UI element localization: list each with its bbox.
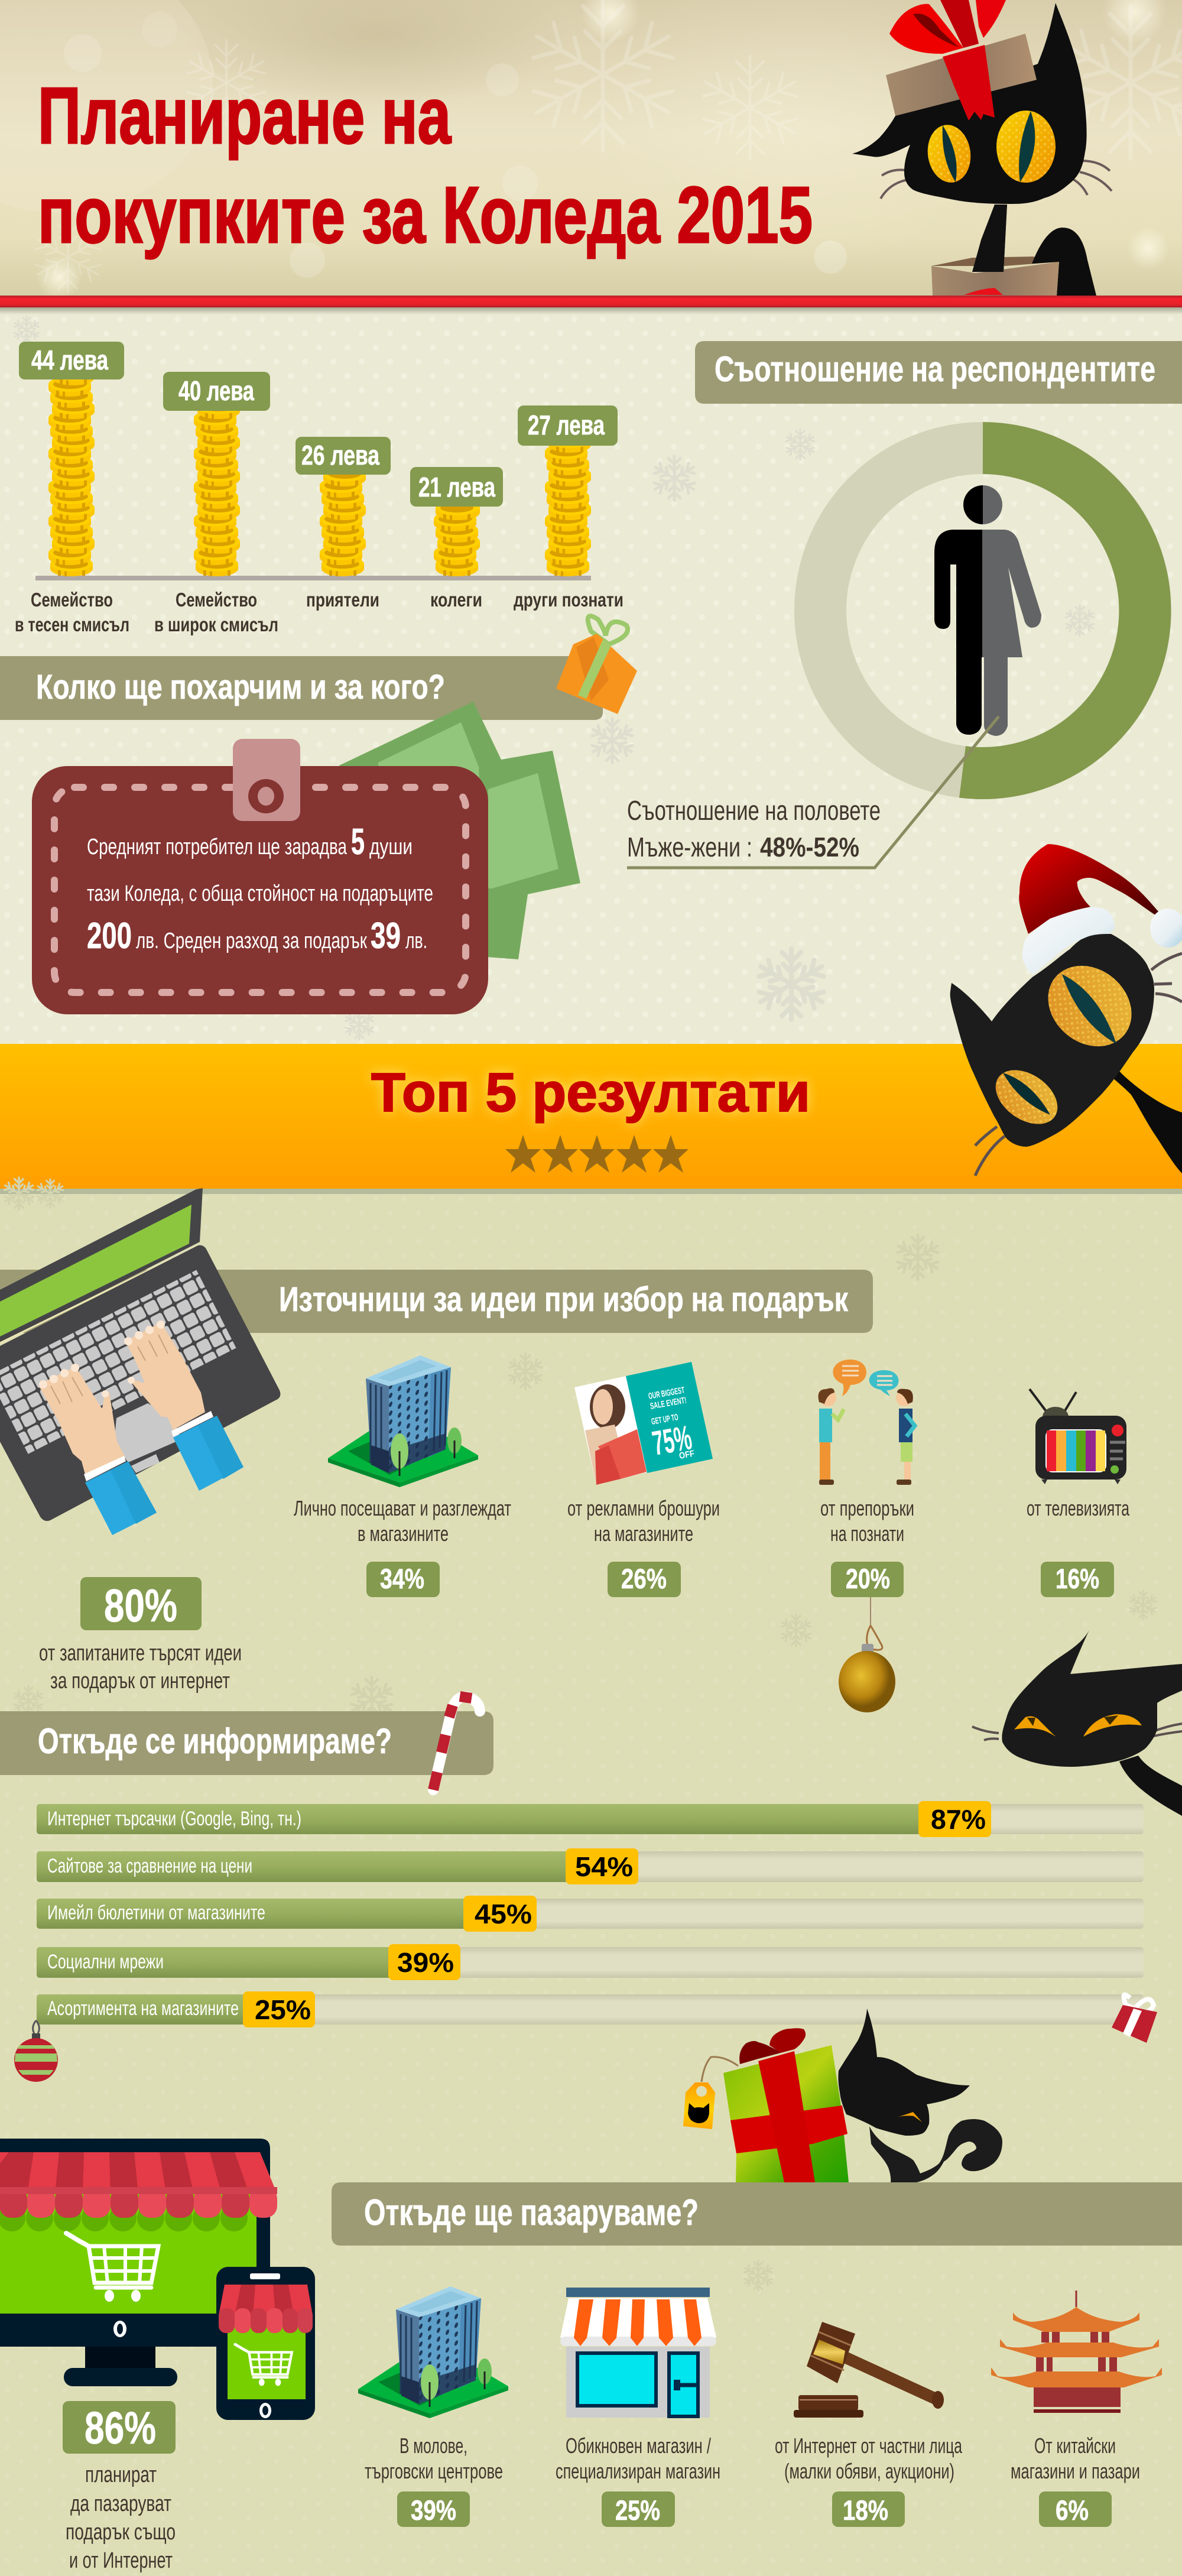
- label: private sellers online: (малки обяви, аукциони): [784, 2459, 954, 2483]
- value label: 27 лева: 27 лева: [528, 410, 605, 440]
- value: 25%: 25%: [615, 2494, 660, 2526]
- coin stack: other acquaintances: [545, 433, 591, 576]
- illustration: online shop monitor: [0, 2139, 277, 2386]
- axis labels: Семейство: [176, 589, 257, 611]
- bar chart: gift spending as coin stacks: [15, 342, 624, 635]
- wallet text: Средният потребител ще зарадва: [87, 835, 348, 859]
- value: 34%: 34%: [380, 1563, 424, 1594]
- left hand and sleeve: [39, 1364, 157, 1535]
- stat: 86% plan to shop online: и от Интернет: [69, 2548, 173, 2573]
- wallet text: лв. Среден разход за подарък: [136, 929, 367, 953]
- value: 16%: [1041, 1562, 1114, 1597]
- bar: 45% email newsletters: [37, 1896, 1144, 1932]
- icon: advertising flyer: [574, 1362, 713, 1485]
- label: flyers: от рекламни брошури: [567, 1496, 720, 1520]
- header banner background: [0, 0, 1182, 300]
- label: visit stores: Лично посещават и разглеждат: [294, 1496, 511, 1520]
- bar: 25% store assortment: 25%: [255, 1994, 311, 2025]
- icon: advertising flyer: 75%: [650, 1418, 694, 1463]
- five stars rating: [505, 1135, 689, 1173]
- stat: 80% search online: за подарък от интернет: [50, 1669, 230, 1693]
- label: recommendations: [820, 1496, 914, 1546]
- heading: how much will we spend: [0, 656, 603, 720]
- value: 16%: 16%: [1056, 1563, 1099, 1594]
- illustration: green banknotes: [339, 702, 580, 959]
- value: 26%: [608, 1562, 681, 1597]
- bar: 54% price comparison: [37, 1848, 1144, 1884]
- axis labels: други познати: [514, 589, 624, 611]
- stat: 80% search online: 80%: [104, 1579, 177, 1631]
- title: Планиране на: [38, 71, 452, 160]
- value label: 21 лева: 21 лева: [418, 472, 495, 502]
- red divider bar: [0, 296, 1182, 314]
- illustration: cat with green present: [683, 2009, 1002, 2182]
- value: 6%: 6%: [1056, 2494, 1089, 2526]
- stat: 86% plan to shop online: планират: [85, 2463, 157, 2487]
- axis labels: в тесен смисъл: [15, 614, 129, 635]
- axis labels: [15, 589, 624, 635]
- monitor awning: [0, 2152, 277, 2218]
- progress bars chart: [37, 1801, 1144, 2027]
- illustration: cat peeking from right: [972, 1630, 1182, 1816]
- value label: 44 лева: 44 лева: [31, 345, 108, 375]
- axis labels: приятели: [306, 589, 379, 611]
- value label: 27 лева: [518, 405, 618, 446]
- value: 26%: 26%: [621, 1563, 667, 1594]
- callout: gender ratio text with leader line: 48%-52%: [760, 832, 859, 862]
- coin stack: family narrow: [48, 365, 95, 576]
- bar: 87% search engines: [37, 1801, 1144, 1837]
- value: 20%: [831, 1562, 904, 1597]
- bar: 39% social networks: Социални мрежи: [47, 1951, 164, 1973]
- wallet clasp: [233, 739, 300, 821]
- bar: 39% social networks: [37, 1944, 1144, 1980]
- callout: gender ratio text with leader line: Съотношение на половете: [627, 795, 881, 826]
- gift tag: [683, 2057, 738, 2129]
- value: 20%: 20%: [846, 1563, 890, 1594]
- heading: where will we shop: Откъде ще пазаруваме?: [364, 2192, 699, 2233]
- label: regular store: специализиран магазин: [556, 2459, 720, 2483]
- icon: store front: [560, 2288, 716, 2418]
- green gift box: [723, 2028, 849, 2182]
- heading: top 5 results: Топ 5 резултати: [371, 1062, 810, 1123]
- heading: how much will we spend: Колко ще похарчим и за кого?: [36, 668, 445, 706]
- stat: 80% search online: [39, 1577, 242, 1693]
- icon: shopping cart: [66, 2233, 158, 2302]
- stat: 86% plan to shop online: [63, 2401, 176, 2573]
- icon: shopping mall building: [358, 2286, 508, 2418]
- icon: half man half woman figure: [934, 485, 1041, 736]
- bar: 25% store assortment: Асортимента на магазините: [47, 1997, 239, 2020]
- wallet text: 39: [371, 916, 401, 956]
- bar: 87% search engines: Интернет търсачки (Google, Bing, тн.): [47, 1808, 301, 1830]
- illustration: online shop phone: [216, 2267, 315, 2420]
- icon: retro television: [1030, 1389, 1126, 1484]
- icon: small red gift: [1112, 1995, 1157, 2043]
- wallet text: [87, 822, 433, 956]
- value label: 40 лева: [163, 372, 270, 411]
- page background: lower section: [0, 1189, 1182, 2576]
- wallet text: 5: [351, 822, 365, 862]
- stat: 86% plan to shop online: да пазаруват: [70, 2491, 171, 2516]
- label: malls: В молове,: [400, 2434, 467, 2458]
- right hand and sleeve: [124, 1321, 243, 1491]
- label: visit stores: в магазините: [358, 1521, 449, 1546]
- bar: 54% price comparison: 54%: [575, 1851, 633, 1882]
- label: flyers: на магазините: [594, 1521, 693, 1546]
- value: 18%: 18%: [843, 2494, 888, 2526]
- label: visit stores: [294, 1496, 511, 1546]
- title: [38, 71, 813, 259]
- coin stack: colleagues: [434, 500, 480, 576]
- value label: 44 лева: [19, 342, 124, 379]
- axis labels: в широк смисъл: [154, 614, 278, 635]
- bar: 45% email newsletters: 45%: [475, 1899, 532, 1929]
- value: 18%: [832, 2491, 905, 2527]
- donut chart: gender ratio: [820, 448, 1145, 773]
- axis labels: колеги: [430, 589, 482, 611]
- bar: 87% search engines: 87%: [931, 1804, 986, 1835]
- value: 34%: [366, 1562, 440, 1597]
- icon: striped ornament: [14, 2020, 58, 2082]
- wallet text: лв.: [405, 929, 427, 953]
- heading: where we get information: [0, 1711, 493, 1775]
- illustration: black cat in santa hat: [950, 844, 1182, 1176]
- icon: office building: [328, 1355, 478, 1487]
- label: television: от телевизията: [1027, 1496, 1130, 1520]
- axis labels: Семейство: [31, 589, 113, 611]
- label: malls: търговски центрове: [365, 2459, 503, 2483]
- stat: 86% plan to shop online: подарък също: [66, 2520, 176, 2545]
- bar: 39% social networks: 39%: [397, 1947, 454, 1978]
- panel: wallet summary: [32, 739, 488, 1014]
- label: malls: [365, 2434, 503, 2483]
- icon: auction gavel: [794, 2322, 944, 2418]
- value: 25%: [602, 2491, 675, 2527]
- icon: orange gift box: [556, 616, 637, 714]
- value label: 21 лева: [410, 467, 503, 507]
- stat: 86% plan to shop online: 86%: [85, 2403, 156, 2454]
- decorative snowflakes: lower section: [3, 1177, 1157, 2291]
- value label: 26 лева: 26 лева: [301, 440, 379, 471]
- wallet text: души: [369, 835, 413, 859]
- callout: gender ratio text with leader line: [627, 716, 999, 868]
- page background: upper section: [0, 307, 1182, 1046]
- heading: where will we shop: [332, 2182, 1182, 2246]
- value label: 26 лева: [296, 437, 391, 475]
- label: private sellers online: от Интернет от частни лица: [775, 2434, 963, 2458]
- icon: advertising flyer: OFF: [678, 1449, 695, 1461]
- icon: two people talking: [818, 1360, 915, 1485]
- icon: gold christmas ornament: [839, 1597, 895, 1712]
- wallet text: тази Коледа, с обща стойност на подаръците: [87, 881, 433, 906]
- orange band: [0, 1044, 1182, 1194]
- icon: chinese pagoda: [991, 2291, 1162, 2413]
- value label: 40 лева: 40 лева: [178, 375, 254, 406]
- heading: gift idea sources: [0, 1270, 873, 1333]
- wallet text: 200: [87, 916, 132, 956]
- label: private sellers online: [775, 2434, 963, 2483]
- illustration: black cat in gift box: [852, 0, 1112, 296]
- label: chinese stores: [1011, 2434, 1140, 2483]
- bar: 25% store assortment: [37, 1991, 1144, 2027]
- callout: gender ratio text with leader line: Мъже-жени :: [627, 832, 752, 862]
- heading: gift idea sources: Източници за идеи при избор на подарък: [279, 1280, 849, 1319]
- icon: advertising flyer: SALE EVENT!: [650, 1395, 687, 1412]
- stat: 80% search online: от запитаните търсят идеи: [39, 1641, 242, 1666]
- title: покупките за Коледа 2015: [38, 170, 813, 259]
- coin stack: family wide: [194, 399, 240, 576]
- decorative snowflakes: upper section: [14, 317, 1095, 1039]
- icon: advertising flyer: GET UP TO: [651, 1412, 679, 1427]
- coin stack: friends: [320, 466, 366, 576]
- label: chinese stores: От китайски: [1034, 2434, 1116, 2458]
- label: regular store: [556, 2434, 720, 2483]
- value: 39%: 39%: [411, 2494, 456, 2526]
- icon: candy cane: [433, 1696, 480, 1790]
- label: recommendations: от препоръки: [820, 1496, 914, 1520]
- bar: 45% email newsletters: Имейл бюлетини от магазините: [47, 1902, 265, 1924]
- heading: respondents ratio: [695, 341, 1182, 404]
- heading: where we get information: Откъде се информираме?: [38, 1721, 392, 1761]
- value: 39%: [397, 2491, 470, 2527]
- label: recommendations: на познати: [830, 1521, 904, 1546]
- icon: advertising flyer: OUR BIGGEST: [648, 1385, 686, 1401]
- bar: 54% price comparison: Сайтове за сравнение на цени: [47, 1855, 252, 1877]
- label: flyers: [567, 1496, 720, 1546]
- label: regular store: Обикновен магазин /: [566, 2434, 711, 2458]
- value: 6%: [1039, 2491, 1112, 2527]
- illustration: laptop with typing hands: [0, 1188, 280, 1535]
